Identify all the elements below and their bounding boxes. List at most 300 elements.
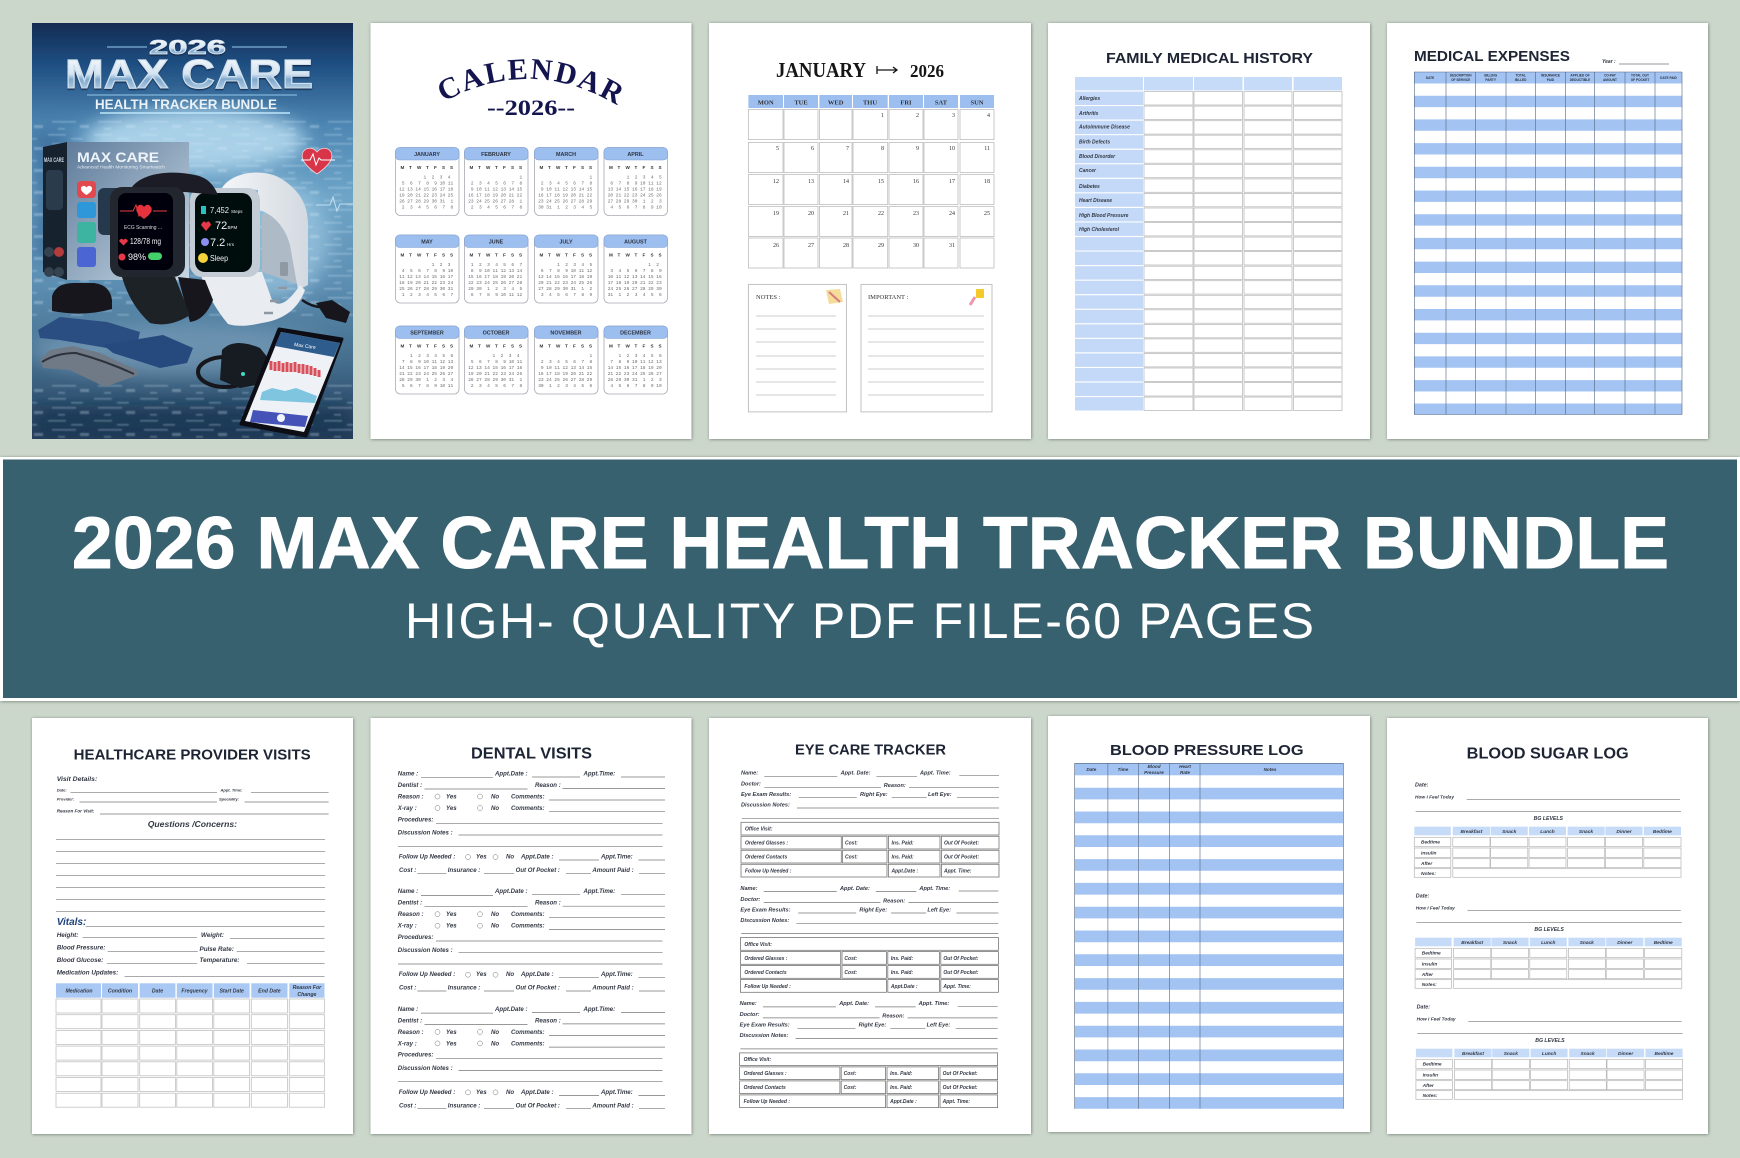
month: October: 2 3 4 5 6 7 8 bbox=[466, 383, 523, 389]
dental record 3: Yes bbox=[446, 1040, 457, 1047]
icon: straps bbox=[38, 317, 193, 387]
dental record 3: Cost : bbox=[399, 1102, 416, 1109]
dental record 2: Appt.Date : bbox=[494, 888, 528, 895]
dental record 2: Reason : bbox=[535, 900, 561, 907]
dental record 3: Reason : bbox=[398, 1029, 424, 1036]
dental record 3: Dentist : bbox=[398, 1017, 422, 1024]
dental record 1: Out Of Pocket : bbox=[516, 867, 560, 874]
month: September: MTWTFSS bbox=[400, 344, 453, 348]
dental record 2: Comments: bbox=[511, 923, 545, 930]
calendar grid: 1 bbox=[881, 113, 884, 119]
month: April: 27 28 29 30 1 2 3 bbox=[605, 198, 662, 204]
eye record 1: Ordered Contacts bbox=[745, 854, 787, 860]
dental record 1: Procedures: bbox=[398, 816, 433, 823]
month: July: 20 21 22 23 24 25 26 bbox=[536, 280, 593, 286]
sugar record 3: Notes: bbox=[1423, 1093, 1438, 1099]
dental record 3: Appt.Time: bbox=[582, 1006, 615, 1013]
month: February: 2 3 4 5 6 7 8 bbox=[466, 180, 523, 186]
panel: eye care tracker bbox=[709, 718, 1031, 1134]
sugar record 3: Bedtime bbox=[1423, 1062, 1442, 1068]
table: Heart Disease bbox=[1079, 198, 1112, 204]
calendar grid: 16 bbox=[913, 179, 919, 185]
table: Allergies bbox=[1078, 96, 1100, 102]
banner subtitle: HIGH- QUALITY PDF FILE-60 PAGES bbox=[405, 593, 1314, 649]
sugar record 2: Snack bbox=[1503, 940, 1517, 946]
sugar record 2: Bedtime bbox=[1422, 950, 1441, 956]
sugar record 3 bbox=[1416, 1004, 1683, 1099]
vitals: Blood Pressure: bbox=[57, 944, 105, 952]
eye record 2: Appt.Date : bbox=[890, 984, 918, 990]
table: Blood bbox=[1147, 764, 1161, 769]
table: OF SERVICE bbox=[1451, 78, 1470, 82]
month: May: 4 5 6 7 8 9 10 bbox=[396, 268, 454, 274]
cover data panel background bbox=[32, 118, 353, 439]
month: February: 9 10 11 12 13 14 15 bbox=[466, 186, 523, 192]
icon: white smartwatch: Steps bbox=[231, 209, 243, 214]
month: March: 2 3 4 5 6 7 8 bbox=[536, 180, 593, 186]
icon: product box: Advanced Health Monitoring Smartwatch bbox=[77, 164, 165, 170]
notes box: NOTES : bbox=[756, 294, 781, 301]
sugar record 2 bbox=[1415, 894, 1682, 988]
weekday header: TUE bbox=[794, 100, 808, 106]
month: May bbox=[396, 235, 459, 303]
medication table: Medication bbox=[65, 988, 93, 994]
month: June: 1 2 3 4 5 6 7 bbox=[466, 262, 523, 268]
month: April: MTWTFSS bbox=[609, 165, 662, 170]
calendar grid: 10 bbox=[949, 146, 955, 152]
dental record 2: No bbox=[506, 971, 514, 978]
icon: charger bbox=[198, 343, 268, 388]
month: August bbox=[604, 235, 668, 303]
month: February: 16 17 18 19 20 21 22 bbox=[466, 192, 523, 198]
banner bbox=[0, 457, 1740, 701]
dental record 1: Insurance : bbox=[448, 867, 480, 874]
eye record 2: Left Eye: bbox=[927, 907, 951, 913]
table: Autoimmune Disease bbox=[1078, 124, 1130, 130]
month: July: 1 2 3 4 5 bbox=[536, 262, 593, 268]
sugar record 1: Date: bbox=[1415, 782, 1429, 788]
dental record 3: Comments: bbox=[511, 1040, 545, 1047]
table: APPLIED OF bbox=[1570, 74, 1590, 78]
medication table: Reason For bbox=[293, 985, 322, 991]
month: January bbox=[396, 148, 459, 216]
sugar record 1: Bedtime bbox=[1653, 829, 1672, 835]
weekday header: MON bbox=[758, 100, 774, 106]
dental record 3: Reason : bbox=[535, 1017, 561, 1024]
month: September: 5 6 7 8 9 10 11 bbox=[396, 383, 454, 389]
calendar grid bbox=[748, 110, 994, 268]
heading: DENTAL VISITS bbox=[471, 745, 592, 762]
table: DATE PAID bbox=[1660, 76, 1678, 80]
dental record 3: No bbox=[491, 1040, 499, 1047]
dental record 1: Amount Paid : bbox=[591, 867, 634, 874]
calendar grid: 13 bbox=[808, 179, 814, 185]
table: CO-PAY bbox=[1604, 74, 1617, 78]
month: May: 1 2 3 bbox=[396, 262, 451, 268]
eye record 1: Ordered Glasses : bbox=[745, 840, 788, 846]
icon: white smartwatch: Hrs bbox=[227, 242, 235, 247]
dental record 2: Procedures: bbox=[398, 934, 433, 941]
important box bbox=[861, 284, 992, 412]
dental record 1: Yes bbox=[476, 854, 487, 860]
notes box bbox=[748, 284, 846, 412]
table: Rate bbox=[1180, 770, 1190, 775]
vitals: Height: bbox=[57, 932, 78, 939]
eye record 2: Appt. Date: bbox=[839, 886, 870, 892]
weekday header: WED bbox=[828, 100, 844, 106]
month: May: 11 12 13 14 15 16 17 bbox=[396, 274, 454, 280]
dental record 2: Amount Paid : bbox=[591, 985, 634, 992]
month: June: MTWTFSS bbox=[470, 252, 522, 258]
calendar grid: 29 bbox=[878, 243, 884, 249]
eye record 3: Ordered Glasses : bbox=[744, 1071, 787, 1077]
dental record 1: Appt.Time: bbox=[600, 854, 633, 860]
dental record 1: X-ray : bbox=[397, 805, 417, 812]
table: Birth Defects bbox=[1079, 140, 1110, 146]
eye record 3: Ins. Paid: bbox=[890, 1071, 913, 1077]
month: November: 30 1 2 3 4 5 6 bbox=[536, 383, 593, 389]
month: June: 6 7 8 9 10 11 12 bbox=[466, 292, 523, 298]
month: July bbox=[534, 235, 598, 303]
table bbox=[1075, 763, 1343, 1109]
vitals: Temperature: bbox=[200, 957, 240, 964]
month: May: MTWTFSS bbox=[400, 252, 453, 258]
icon: white smartwatch: BPM bbox=[228, 225, 238, 230]
eye record 1: Office Visit: bbox=[745, 826, 773, 832]
eye record 1: Appt. Time: bbox=[919, 770, 951, 776]
dental record 2: Discussion Notes : bbox=[398, 947, 453, 954]
month: June bbox=[464, 235, 528, 303]
table: Cancer bbox=[1079, 168, 1097, 174]
eye record 1: Follow Up Needed : bbox=[745, 868, 792, 874]
sugar record 1: BG LEVELS bbox=[1534, 816, 1564, 822]
vitals: Medication Updates: bbox=[57, 970, 118, 976]
month: April: 4 5 6 7 8 9 10 bbox=[605, 204, 662, 210]
calendar grid: 9 bbox=[916, 146, 919, 152]
medication table: Change bbox=[297, 992, 317, 998]
eye record 2: Follow Up Needed : bbox=[744, 984, 791, 990]
month: June: 15 16 17 18 19 20 21 bbox=[466, 274, 523, 280]
heading: calendar: CALENDAR bbox=[439, 59, 622, 106]
dental record 1: Dentist : bbox=[398, 782, 422, 789]
eye record 3: Office Visit: bbox=[744, 1057, 771, 1063]
icon: black smartwatch: 128/78 mg bbox=[130, 237, 161, 246]
calendar grid: 7 bbox=[846, 146, 849, 152]
weekday header: SUN bbox=[970, 100, 984, 106]
cover background glow bbox=[30, 108, 353, 439]
month: January: 5 6 7 8 9 10 11 bbox=[396, 180, 454, 186]
panel: dental visits bbox=[370, 718, 692, 1134]
month: October bbox=[464, 326, 528, 394]
month: April bbox=[604, 148, 668, 216]
calendar grid: 27 bbox=[808, 243, 814, 249]
month: January: JANUARY bbox=[414, 152, 440, 158]
dental record 3: Out Of Pocket : bbox=[516, 1102, 560, 1109]
eye record 2: Office Visit: bbox=[744, 942, 772, 948]
calendar grid: 24 bbox=[949, 211, 955, 217]
icon: product box: MAX CARE bbox=[77, 149, 159, 165]
eye record 2: Appt. Time: bbox=[918, 886, 950, 892]
table: Notes bbox=[1264, 767, 1277, 772]
icon: product box bbox=[43, 142, 189, 280]
month: June: 8 9 10 11 12 13 14 bbox=[466, 268, 523, 274]
eye record 3: Cost: bbox=[844, 1085, 857, 1091]
month: December: 1 2 3 4 5 6 bbox=[605, 353, 662, 359]
month: April: 13 14 15 16 17 18 19 bbox=[605, 186, 662, 192]
medication table: Date bbox=[152, 988, 163, 994]
sugar record 2: Date: bbox=[1416, 894, 1429, 900]
eye record 3: Reason: bbox=[882, 1014, 905, 1020]
eye record 3: Discussion Notes: bbox=[740, 1033, 789, 1039]
eye record 2: Ins. Paid: bbox=[891, 970, 913, 976]
dental record 2: Yes bbox=[446, 911, 457, 918]
sugar record 3: Bedtime bbox=[1655, 1051, 1674, 1057]
weekday header bbox=[748, 95, 994, 108]
month: November: 23 24 25 26 27 28 29 bbox=[536, 377, 593, 383]
cover title: HEALTH TRACKER BUNDLE bbox=[95, 96, 277, 112]
month: November: NOVEMBER bbox=[550, 330, 582, 336]
sugar record 3: Breakfast bbox=[1462, 1051, 1484, 1057]
month: October: 5 6 7 8 9 10 11 bbox=[466, 359, 523, 365]
month: October: 19 20 21 22 23 24 25 bbox=[466, 371, 523, 377]
dental record 1: Yes bbox=[446, 805, 457, 812]
eye record 1: Reason: bbox=[884, 783, 906, 789]
month: October: 1 2 3 4 bbox=[466, 353, 520, 359]
table: DATE bbox=[1426, 76, 1434, 80]
month: December: 7 8 9 10 11 12 13 bbox=[605, 359, 662, 365]
month: July: MTWTFSS bbox=[540, 252, 592, 258]
sugar record 2: Notes: bbox=[1422, 982, 1437, 988]
month: August: MTWTFSS bbox=[609, 252, 662, 258]
month: March: 9 10 11 12 13 14 15 bbox=[536, 186, 593, 192]
vitals: Vitals: bbox=[57, 917, 86, 928]
month: August: 1 2 bbox=[605, 262, 659, 268]
month: July: 3 4 5 6 7 8 9 bbox=[536, 292, 593, 298]
dental record 2: No bbox=[491, 923, 499, 930]
dental record 3 bbox=[397, 1006, 665, 1109]
banner title: 2026 MAX CARE HEALTH TRACKER BUNDLE bbox=[72, 503, 1669, 584]
heading: EYE CARE TRACKER bbox=[795, 742, 947, 758]
heading: January 2026: 2026 bbox=[910, 61, 944, 81]
dental record 2: Name : bbox=[398, 888, 418, 895]
month: August: 10 11 12 13 14 15 16 bbox=[605, 274, 662, 280]
month: October: 26 27 28 29 30 31 1 bbox=[466, 377, 523, 383]
icon: white smartwatch: 7,452 bbox=[210, 206, 230, 215]
dental record 2: Yes bbox=[476, 971, 487, 978]
visit details: Speciality: bbox=[219, 796, 240, 802]
icon: heart badge bbox=[301, 148, 353, 211]
month: July: JULY bbox=[559, 240, 573, 246]
eye record 2: Out Of Pocket: bbox=[943, 956, 979, 962]
eye record 3: Right Eye: bbox=[859, 1023, 886, 1029]
eye record 2: Appt. Time: bbox=[942, 984, 971, 990]
eye record 2: Ordered Contacts bbox=[744, 970, 787, 976]
month: May: MAY bbox=[421, 240, 433, 246]
month: November bbox=[534, 326, 598, 394]
month: December: 28 29 30 31 1 2 3 bbox=[605, 377, 662, 383]
dental record 2: Appt.Time: bbox=[600, 971, 633, 978]
month: July: 27 28 29 30 31 1 2 bbox=[536, 286, 593, 292]
table: Time bbox=[1118, 767, 1129, 772]
table bbox=[1414, 72, 1682, 414]
medication table bbox=[56, 983, 324, 1107]
dental record 2: Appt.Date : bbox=[520, 971, 554, 978]
month: August: 24 25 26 27 28 29 30 bbox=[605, 286, 662, 292]
eye record 1: Right Eye: bbox=[860, 792, 888, 798]
icon: usb cable bbox=[302, 300, 350, 323]
table: Heart bbox=[1179, 764, 1191, 769]
sugar record 1: After bbox=[1420, 861, 1433, 867]
dental record 3: Yes bbox=[476, 1089, 487, 1096]
eye record 1: Eye Exam Results: bbox=[741, 792, 791, 798]
sugar record 2: After bbox=[1421, 972, 1434, 978]
month: May: 18 19 20 21 22 23 24 bbox=[396, 280, 454, 286]
month: October: OCTOBER bbox=[483, 330, 510, 336]
month: February: 1 bbox=[466, 174, 523, 180]
dental record 3: Yes bbox=[446, 1029, 457, 1036]
eye record 1: Ins. Paid: bbox=[892, 854, 914, 860]
month: January: 1 2 3 4 bbox=[396, 174, 451, 180]
dental record 2: No bbox=[491, 911, 499, 918]
visit details: Date: bbox=[57, 788, 67, 792]
panel: calendar overview bbox=[369, 22, 694, 442]
icon: white smartwatch: 72 bbox=[215, 220, 227, 232]
eye record 2: Cost: bbox=[844, 970, 858, 976]
panel: January planner bbox=[709, 23, 1031, 439]
month: February bbox=[464, 148, 528, 216]
month: December: 14 15 16 17 18 19 20 bbox=[605, 365, 662, 371]
sugar record 1: Insulin bbox=[1421, 850, 1437, 856]
month: November: 2 3 4 5 6 7 8 bbox=[536, 359, 593, 365]
visit details: Appt. Time: bbox=[220, 788, 243, 792]
eye record 3: Out Of Pocket: bbox=[943, 1085, 978, 1091]
dental record 3: Follow Up Needed : bbox=[399, 1089, 455, 1096]
sugar record 1: Snack bbox=[1502, 829, 1517, 835]
dental record 1: Yes bbox=[446, 794, 457, 800]
calendar grid: 30 bbox=[913, 243, 919, 249]
visit details: Provider: bbox=[57, 796, 75, 802]
sugar record 3: Snack bbox=[1581, 1051, 1595, 1057]
month: March: 16 17 18 19 20 21 22 bbox=[536, 192, 593, 198]
sugar record 2: Bedtime bbox=[1654, 940, 1673, 946]
medication table: Condition bbox=[108, 988, 132, 994]
month: October: 12 13 14 15 16 17 18 bbox=[466, 365, 523, 371]
visit details bbox=[57, 776, 329, 814]
dental record 2: Reason : bbox=[398, 911, 424, 918]
calendar grid: 3 bbox=[952, 113, 955, 119]
calendar grid: 28 bbox=[843, 243, 849, 249]
heading: BLOOD SUGAR LOG bbox=[1467, 746, 1629, 763]
sugar record 3: Snack bbox=[1504, 1051, 1518, 1057]
month: December bbox=[604, 326, 668, 394]
sugar record 1: Snack bbox=[1579, 829, 1593, 835]
eye record 1: Doctor: bbox=[741, 782, 761, 788]
table: OF POCKET bbox=[1631, 78, 1649, 82]
dental record 3: Insurance : bbox=[448, 1102, 480, 1109]
dental record 3: X-ray : bbox=[397, 1040, 417, 1047]
dental record 2: Insurance : bbox=[448, 985, 480, 992]
month: February: 2 3 4 5 6 7 8 bbox=[466, 204, 523, 210]
month: September: 1 2 3 4 5 6 bbox=[396, 353, 454, 359]
table bbox=[1075, 77, 1342, 410]
dental record 1: No bbox=[491, 805, 499, 812]
eye record 2: Right Eye: bbox=[859, 907, 887, 913]
month: September: 7 8 9 10 11 12 13 bbox=[396, 359, 454, 365]
dental record 1: Reason : bbox=[398, 794, 424, 800]
visit details: Reason For Visit: bbox=[57, 808, 95, 814]
cover title bbox=[65, 37, 313, 113]
table: Date bbox=[1086, 767, 1097, 772]
sugar record 2: BG LEVELS bbox=[1534, 927, 1564, 933]
eye record 3: Out Of Pocket: bbox=[943, 1071, 978, 1077]
panel: family medical history bbox=[1048, 23, 1370, 439]
eye record 3 bbox=[740, 1001, 998, 1108]
heading: 2026: --2026-- bbox=[487, 95, 575, 120]
month: January: 26 27 28 29 30 31 1 bbox=[396, 198, 454, 204]
eye record 1 bbox=[741, 770, 999, 877]
calendar grid: 23 bbox=[913, 211, 919, 217]
calendar grid: 6 bbox=[811, 146, 814, 152]
dental record 1: Appt.Date : bbox=[494, 770, 528, 778]
month: February: FEBRUARY bbox=[481, 152, 511, 158]
month: August: 31 1 2 3 4 5 6 bbox=[605, 292, 662, 298]
month: May: 1 2 3 4 5 6 7 bbox=[396, 292, 454, 298]
calendar grid: 17 bbox=[949, 179, 955, 185]
table: PAID bbox=[1547, 78, 1555, 82]
weekday header: THU bbox=[863, 100, 877, 106]
dental record 1: Follow Up Needed : bbox=[399, 854, 455, 860]
month: April: 1 2 3 4 5 bbox=[605, 174, 662, 180]
dental record 2: Comments: bbox=[511, 911, 545, 918]
month: October: MTWTFSS bbox=[470, 344, 522, 348]
table: Pressure bbox=[1144, 770, 1164, 775]
questions and concerns bbox=[56, 819, 325, 911]
visit details: Visit Details: bbox=[57, 776, 97, 783]
month: December: DECEMBER bbox=[620, 330, 651, 336]
month: June: 29 30 1 2 3 4 5 bbox=[466, 286, 523, 292]
eye record 2: Ordered Glasses : bbox=[744, 956, 788, 962]
year field bbox=[1602, 59, 1669, 65]
medication table: End Date bbox=[258, 988, 281, 994]
heading: January 2026: JANUARY bbox=[776, 58, 866, 82]
icon: black smartwatch: ECG Scanning ... bbox=[124, 225, 162, 231]
dental record 1: Cost : bbox=[399, 867, 416, 874]
eye record 3: Doctor: bbox=[740, 1012, 760, 1018]
eye record 2: Eye Exam Results: bbox=[740, 907, 791, 913]
dental record 1: Comments: bbox=[511, 794, 545, 800]
month: August: AUGUST bbox=[624, 240, 648, 246]
eye record 2 bbox=[740, 886, 998, 992]
sugar record 2: Snack bbox=[1580, 940, 1594, 946]
calendar grid: 18 bbox=[984, 179, 990, 185]
eye record 3: Left Eye: bbox=[927, 1023, 950, 1029]
month: March: 23 24 25 26 27 28 29 bbox=[536, 198, 593, 204]
weekday header: FRI bbox=[900, 100, 912, 106]
dental record 2: Out Of Pocket : bbox=[516, 985, 560, 992]
month: August: 3 4 5 6 7 8 9 bbox=[605, 268, 662, 274]
dental record 2: Cost : bbox=[399, 985, 416, 992]
table: High Cholesterol bbox=[1079, 227, 1120, 233]
eye record 1: Appt.Date : bbox=[890, 868, 918, 874]
dental record 1: Appt.Date : bbox=[520, 854, 554, 860]
sugar record 2: Lunch bbox=[1541, 940, 1556, 946]
table: INSURANCE bbox=[1541, 74, 1560, 78]
dental record 3: Name : bbox=[398, 1006, 418, 1013]
table: DESCRIPTION bbox=[1450, 74, 1472, 78]
table: Blood Disorder bbox=[1079, 154, 1116, 160]
table: TOTAL OUT bbox=[1631, 74, 1649, 78]
icon: black smartwatch: 98% bbox=[128, 252, 146, 262]
